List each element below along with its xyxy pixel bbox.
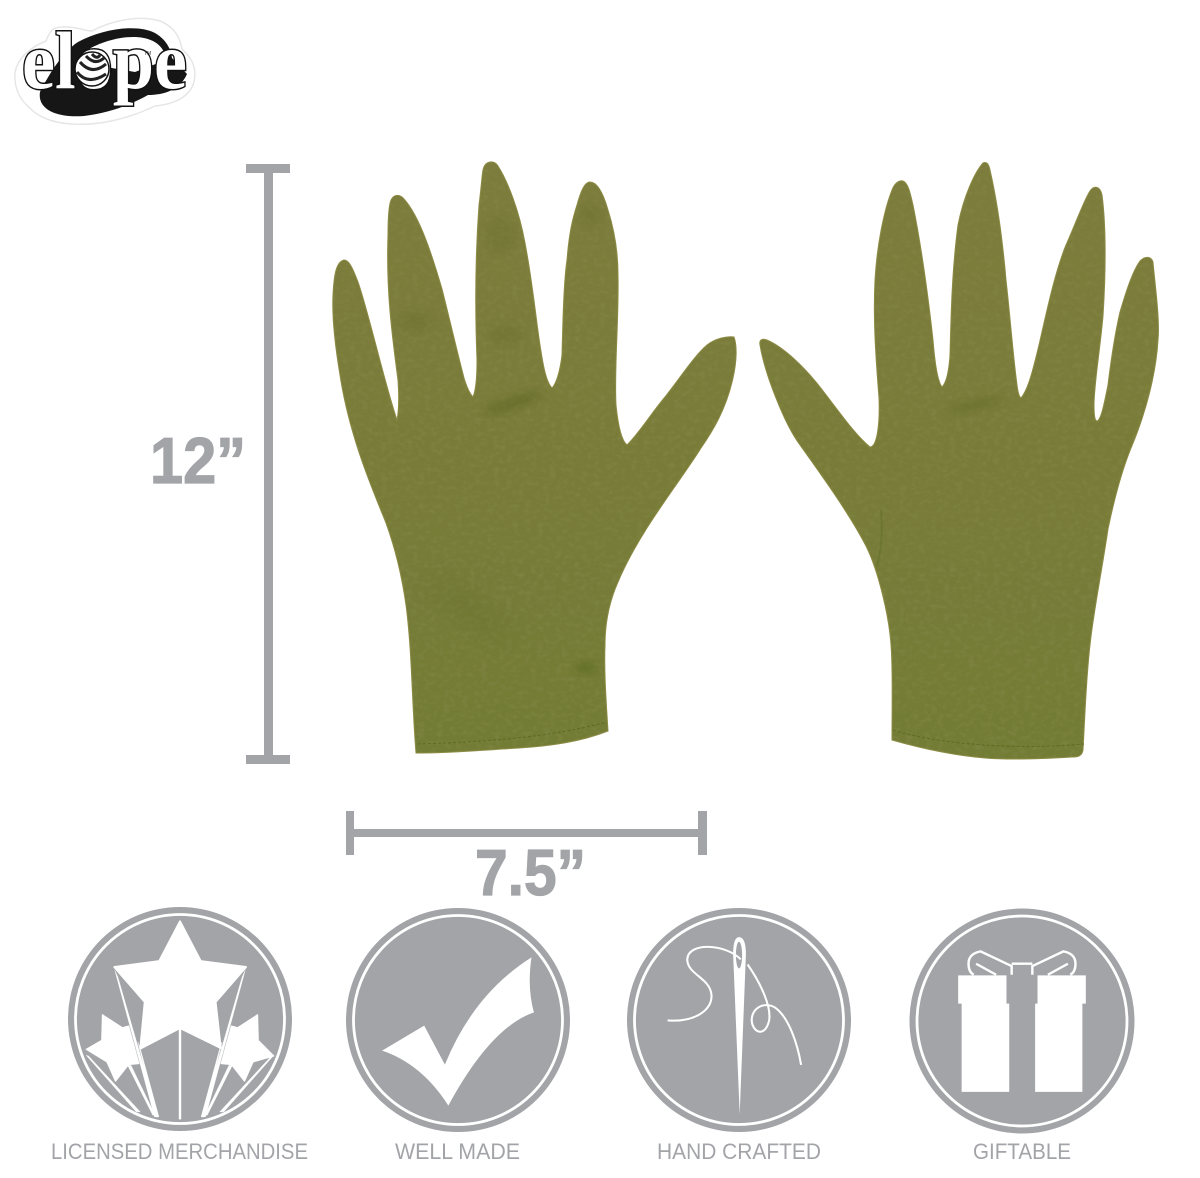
check mark icon: [346, 908, 570, 1132]
badge: well made: [346, 908, 570, 1164]
badge: hand crafted: [627, 908, 851, 1164]
left glove fabric shading: [412, 320, 594, 674]
glove: right: [760, 162, 1158, 759]
right glove fold shading: [947, 394, 1003, 416]
label: LICENSED MERCHANDISE: [51, 1139, 308, 1164]
glove: left: [333, 162, 736, 753]
dimension: width 7.5 inches: [346, 811, 707, 909]
left glove cuff stitching: [418, 722, 606, 744]
badge: giftable: [910, 908, 1134, 1164]
left glove shape: [333, 162, 736, 753]
logo trademark: TM: [144, 51, 151, 57]
width label: 7.5”: [475, 836, 586, 909]
right glove thumb seam: [877, 510, 882, 566]
logo sticker backing: [15, 18, 195, 124]
needle and thread icon: [627, 908, 851, 1132]
dimension: height 12 inches: [150, 164, 290, 764]
label: HAND CRAFTED: [657, 1139, 821, 1164]
logo swirl ball: [75, 52, 109, 86]
star icon: [68, 907, 292, 1131]
right glove shape: [760, 162, 1158, 759]
height label: 12”: [150, 424, 246, 497]
label: WELL MADE: [395, 1139, 520, 1164]
badge: licensed merchandise: [51, 907, 308, 1164]
logo black swoosh: [40, 28, 187, 116]
logo: elope: [15, 15, 195, 124]
right glove cuff stitching: [893, 730, 1084, 746]
width bracket: [346, 811, 707, 855]
label: GIFTABLE: [973, 1139, 1071, 1164]
gift box icon: [910, 908, 1134, 1134]
height bracket: [246, 164, 290, 764]
logo wordmark: elope: [22, 15, 187, 106]
